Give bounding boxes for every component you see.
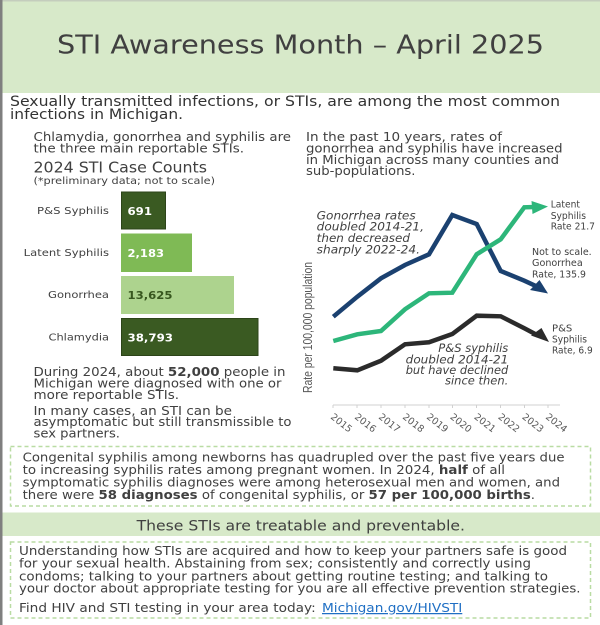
label: latent syphilis rate xyxy=(551,200,595,232)
prevention text: your doctor about appropriate testing for you are all effective prevention strategies. xyxy=(19,581,580,596)
x axis xyxy=(328,405,569,435)
label: gonorrhea rate: Not to scale. xyxy=(532,247,592,258)
annotation: P&S syphilis: doubled 2014-21 xyxy=(406,352,508,366)
line: P&S syphilis rate xyxy=(333,316,549,370)
text: 52,000 diagnosed: During 2024, about 52,000 people in xyxy=(34,364,286,379)
x axis: 2023 xyxy=(520,412,545,435)
intro text: Sexually transmitted infections, or STIs, are among the most common xyxy=(10,94,560,110)
x axis: 2021 xyxy=(472,412,497,435)
bar: chlamydia xyxy=(48,318,258,356)
label: P&S syphilis rate: P&S xyxy=(552,324,572,335)
bar: latent syphilis: 2,183 xyxy=(128,248,164,260)
annotation: P&S syphilis: P&S syphilis xyxy=(438,341,508,355)
panel: congenital syphilis callout: symptomatic syphilis diagnoses were among heterosexual men and women, and xyxy=(23,475,560,490)
annotation: P&S syphilis: since then. xyxy=(445,374,508,388)
annotation: P&S syphilis: but have declined xyxy=(406,363,509,377)
testing link line: Michigan.gov/HIVSTI xyxy=(322,600,462,615)
text: 52,000 diagnosed: Michigan were diagnosed with one or xyxy=(34,376,282,390)
intro text xyxy=(10,94,560,123)
bar: latent syphilis xyxy=(24,234,192,272)
label: latent syphilis rate: Rate 21.7 xyxy=(551,222,595,232)
label: gonorrhea rate: Rate, 135.9 xyxy=(532,269,586,280)
panel: congenital syphilis callout: to increasing syphilis rates among pregnant women. In 2024, half of all xyxy=(23,462,505,477)
annotation: gonorrhea rates: sharply 2022-24. xyxy=(317,242,420,256)
label: P&S syphilis rate: Syphilis xyxy=(552,334,587,346)
bar: P&S syphilis xyxy=(37,192,166,229)
x axis: 2016 xyxy=(352,412,378,435)
text: asymptomatic xyxy=(34,403,292,440)
text: asymptomatic: asymptomatic but still transmissible to xyxy=(34,414,292,429)
right column intro text: sub-populations. xyxy=(306,163,416,178)
left column intro text: Chlamydia, gonorrhea and syphilis are xyxy=(34,129,291,144)
panel: prevention strategies xyxy=(10,542,590,618)
bar: chlamydia: 38,793 xyxy=(128,332,173,344)
text: 52,000 diagnosed: more reportable STIs. xyxy=(34,387,179,402)
prevention text: for your sexual health. Abstaining from sex; consistently and correctly using xyxy=(19,556,531,571)
bar: P&S syphilis: 691 xyxy=(128,206,152,218)
left column intro text: the three main reportable STIs. xyxy=(34,140,244,156)
text: asymptomatic: In many cases, an STI can be xyxy=(34,403,232,418)
annotation: gonorrhea rates: Gonorrhea rates xyxy=(317,208,416,222)
bar: gonorrhea: 13,625 xyxy=(128,290,172,302)
right column intro text: gonorrhea and syphilis have increased xyxy=(306,140,562,156)
banner: treatable and preventable: These STIs are treatable and preventable. xyxy=(136,518,465,534)
bar chart heading xyxy=(34,158,215,187)
label: latent syphilis rate: Latent xyxy=(551,200,580,211)
label: P&S syphilis rate xyxy=(552,324,593,356)
banner: treatable and preventable xyxy=(2,512,600,536)
bar chart heading: 2024 STI Case Counts xyxy=(34,158,207,176)
bar: gonorrhea: Gonorrhea xyxy=(48,290,109,301)
annotation: gonorrhea rates xyxy=(317,208,424,256)
x axis: 2019 xyxy=(424,412,450,435)
bar chart: 2024 STI case counts xyxy=(24,158,258,356)
annotation: gonorrhea rates: doubled 2014-21, xyxy=(317,220,424,234)
right column intro text: In the past 10 years, rates of xyxy=(306,129,503,144)
annotation: P&S syphilis xyxy=(406,341,509,388)
label: gonorrhea rate xyxy=(532,247,592,280)
annotation: gonorrhea rates: then decreased xyxy=(317,231,411,245)
prevention text: Understanding how STIs are acquired and how to keep your partners safe is good xyxy=(19,543,567,558)
text: asymptomatic: sex partners. xyxy=(34,425,120,440)
x axis: 2015 xyxy=(328,412,354,435)
bar: gonorrhea xyxy=(48,276,234,314)
x axis: 2017 xyxy=(376,412,402,435)
header banner xyxy=(2,0,600,93)
panel: congenital syphilis callout: there were 58 diagnoses of congenital syphilis, or 57 per 100,000 births . xyxy=(23,487,535,502)
label: latent syphilis rate: Syphilis xyxy=(551,211,586,222)
text: 52,000 diagnosed xyxy=(34,364,286,402)
title: STI Awareness Month – April 2025 xyxy=(57,30,544,60)
bar: chlamydia: Chlamydia xyxy=(48,332,109,344)
intro text: infections in Michigan. xyxy=(10,107,183,123)
x axis: 2022 xyxy=(496,412,521,435)
testing link line xyxy=(19,600,462,615)
label: gonorrhea rate: Gonorrhea xyxy=(532,258,583,269)
bar: latent syphilis: Latent Syphilis xyxy=(24,248,109,259)
x axis: 2020 xyxy=(448,412,473,435)
line: latent syphilis rate xyxy=(333,201,548,341)
prevention text xyxy=(19,543,580,596)
panel: congenital syphilis callout xyxy=(10,446,590,506)
right column intro text: in Michigan across many counties and xyxy=(306,152,559,167)
right column intro text xyxy=(306,129,562,178)
panel: congenital syphilis callout: Congenital syphilis among newborns has quadrupled over the past five years due xyxy=(23,450,565,465)
line: gonorrhea rate xyxy=(333,215,548,317)
line chart: rates 2015-2024 xyxy=(300,200,595,435)
x axis: 2018 xyxy=(400,412,426,435)
label: P&S syphilis rate: Rate, 6.9 xyxy=(552,345,593,356)
bar: P&S syphilis: P&S Syphilis xyxy=(37,206,109,217)
prevention text: condoms; talking to your partners about getting routine testing; and talking to xyxy=(19,568,548,583)
y axis title: Rate per 100,000 population xyxy=(300,262,315,393)
x axis: 2024 xyxy=(543,412,569,435)
bar chart heading: (*preliminary data; not to scale) xyxy=(34,176,215,187)
left column intro text xyxy=(34,129,291,156)
testing link line: Find HIV and STI testing in your area today: xyxy=(19,600,316,615)
